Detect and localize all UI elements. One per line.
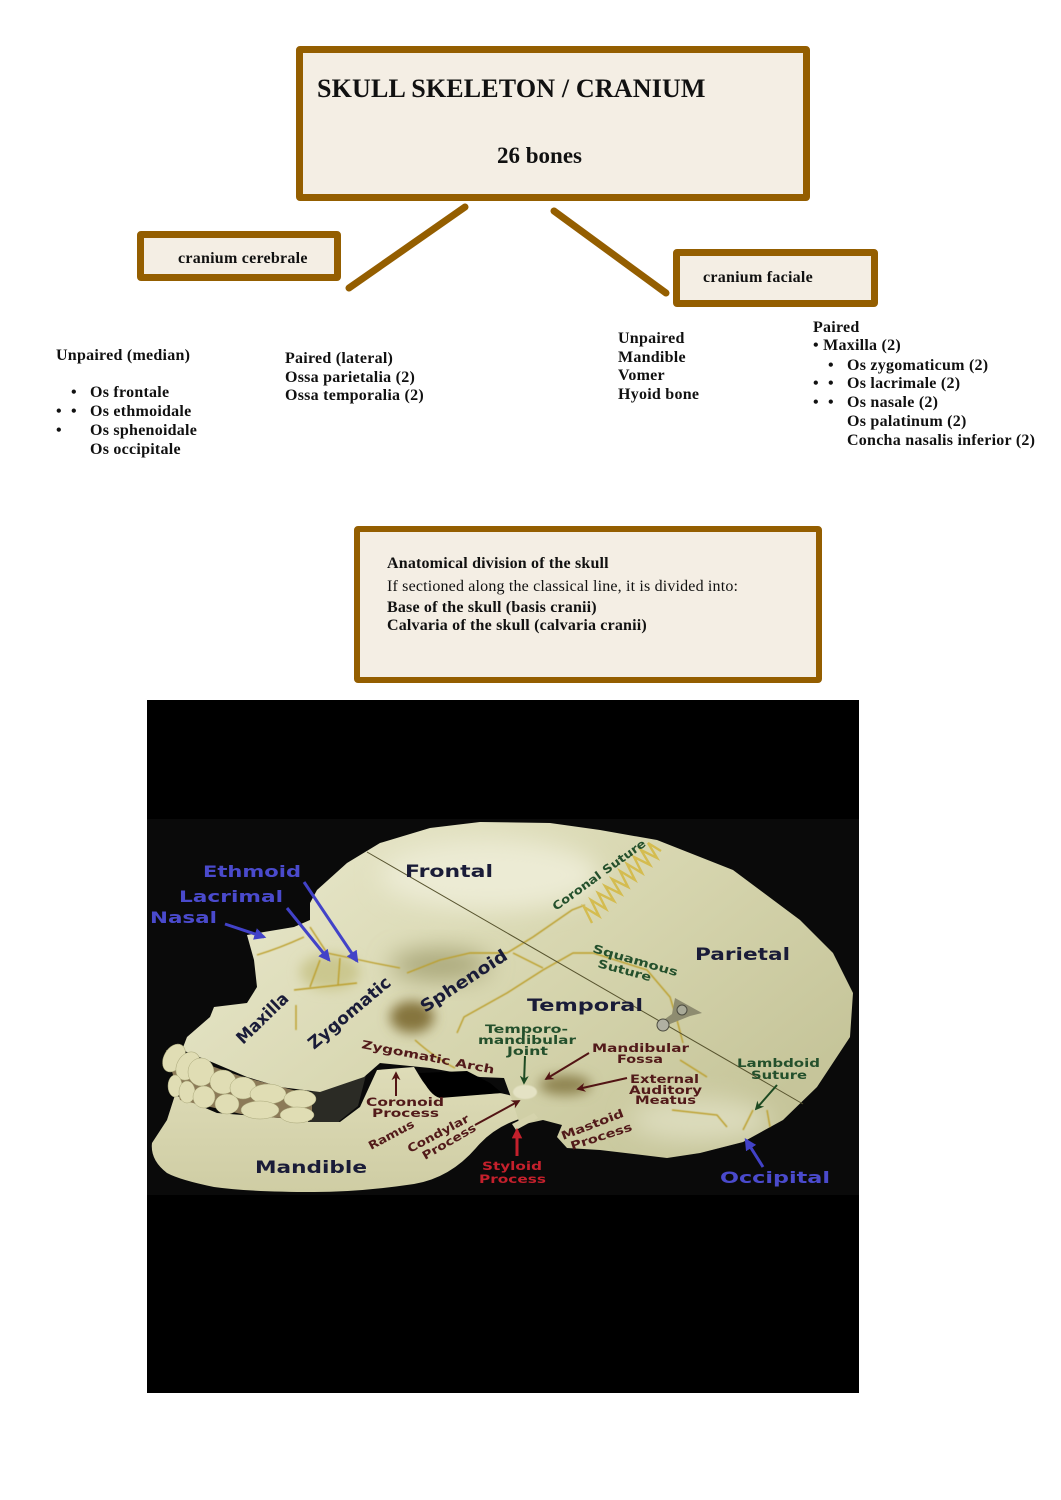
text: base of the skull: Base of the skull (basis cranii) [387,599,597,616]
text block: unpaired median bones: Os frontale [90,384,169,401]
label: Suture (lambdoid): Suture [751,1068,807,1082]
label: Condylar Process second line: Process [420,1120,479,1163]
text block: unpaired median bones: • [71,384,77,401]
label: Joint: Joint [506,1044,549,1058]
green arrows [524,1056,777,1109]
teeth [158,1040,316,1123]
label: Mandibular Fossa: Mandibular [592,1041,689,1055]
label: cranium cerebrale: cranium cerebrale [178,250,308,267]
arrow: styloid process [516,1130,518,1156]
sutures [257,905,770,1130]
label: Zygomatic: Zygomatic [304,973,395,1054]
tooth gum base [166,1050,312,1120]
arrow: temporomandibular joint [524,1056,525,1083]
text block: paired facial bones: • [828,357,834,374]
label: Styloid: Styloid [482,1159,542,1173]
sphenofrontal suture [407,905,585,973]
text block: unpaired facial bones: Vomer [618,367,665,384]
arrow: occipital [746,1140,763,1167]
arrow: mandibular fossa [546,1053,589,1079]
styloid process [512,1113,538,1130]
label: Maxilla: Maxilla [233,989,293,1049]
zygomatic facial suture [295,1005,297,1030]
text block: unpaired median bones: • [56,403,62,420]
label: Frontal: Frontal [405,862,493,882]
connector to cranium faciale [554,211,666,293]
image band [147,819,859,1195]
label: External Auditory Meatus third line: Meatus [635,1093,696,1107]
label: Squamous: Squamous [591,941,680,979]
text: calvaria of the skull: Calvaria of the skull (calvaria cranii) [387,617,647,634]
label: Mandibular Fossa second line: Fossa [617,1052,663,1066]
label: Ethmoid: Ethmoid [203,862,301,881]
label: Sphenoid: Sphenoid [417,946,512,1017]
text block: paired facial bones: • [813,394,819,411]
heading: anatomical division: Anatomical division of the skull [387,555,609,572]
pin screw 1 [677,1005,687,1015]
arrows: connector lines [346,204,670,296]
diagonal section line [367,852,803,1104]
label: Occipital: Occipital [720,1168,830,1187]
label: Mastoid Process second line: Process [569,1120,634,1153]
text block: unpaired median bones: Unpaired (median) [56,347,190,364]
bone labels [233,862,790,1178]
maroon labels [360,1037,703,1163]
text block: paired lateral bones: Ossa temporalia (2) [285,387,424,404]
label: Parietal: Parietal [695,945,790,965]
text block: paired facial bones [813,319,1035,449]
zygomatic arch hole [419,1071,502,1098]
blue labels [150,862,830,1187]
label: cranium faciale: cranium faciale [703,269,813,286]
text block: paired facial bones: Os palatinum (2) [847,413,967,430]
label: Nasal: Nasal [150,908,217,927]
text block: paired facial bones: • Maxilla (2) [813,337,901,354]
blue arrows [225,882,763,1167]
arrow: condylar [475,1101,519,1125]
pin plate [658,998,702,1028]
text block: unpaired median bones: Os occipitale [90,441,181,458]
zygomatic arch suture [415,1040,455,1068]
text block: paired lateral bones: Ossa parietalia (2) [285,369,415,386]
cranium and upper face [182,822,853,1158]
sphenoparietal branch [513,953,543,968]
label: Mastoid: Mastoid [559,1106,626,1143]
shading on skull [300,839,770,1142]
label: Zygomatic Arch: Zygomatic Arch [360,1037,496,1077]
label: Lacrimal: Lacrimal [179,887,283,906]
gap behind teeth [308,1075,366,1122]
panel: title box [296,46,810,201]
panel: anatomical division of the skull [354,526,822,683]
text block: paired facial bones: Os nasale (2) [847,394,938,411]
text block: unpaired facial bones [618,330,699,403]
text block: unpaired median bones: Os ethmoidale [90,403,191,420]
arrow: lambdoid suture [756,1085,777,1109]
text block: unpaired median bones: • [56,422,62,439]
label: Mandible: Mandible [255,1158,367,1178]
label: Suture: Suture [596,956,653,984]
coronal suture [584,843,661,923]
text block: unpaired facial bones: Mandible [618,349,686,366]
maroon arrows [396,1053,627,1125]
image background [147,700,859,1393]
text block: paired facial bones: Concha nasalis inferior (2) [847,432,1035,449]
mandible [152,1067,535,1192]
text block: paired lateral bones [285,350,424,404]
nasal suture [257,937,304,955]
label: Coronoid Process second line: Process [372,1106,439,1120]
label: Coronoid Process: Coronoid [366,1095,444,1109]
arrow: ethmoid [304,882,357,961]
squamous suture [457,953,683,1043]
styloid label [479,1159,546,1186]
label: Condylar Process: Condylar [405,1111,472,1156]
label: Coronal Suture: Coronal Suture [550,836,649,913]
arrow: coronoid [395,1073,397,1096]
illustration: labelled lateral skull [147,700,859,1393]
green labels [478,836,820,1082]
label: Process (styloid): Process [479,1172,546,1186]
label: Temporo-: Temporo- [485,1022,568,1036]
rear highlight [630,1098,770,1142]
label: External Auditory Meatus second line: Auditory [629,1083,703,1097]
text block: unpaired median bones: • [71,403,77,420]
orbit sutures [310,927,400,968]
text block: paired lateral bones: Paired (lateral) [285,350,393,367]
text block: unpaired median bones: Os sphenoidale [90,422,197,439]
text block: unpaired median bones [56,347,197,458]
text block: unpaired facial bones: Hyoid bone [618,386,699,403]
arrow: nasal [225,924,264,937]
label: mandibular: mandibular [478,1033,576,1047]
temple shadow [390,1001,434,1033]
upper skull highlight [380,839,600,911]
text block: unpaired facial bones: Unpaired [618,330,685,347]
arrow: lacrimal [287,908,329,960]
condyle highlight [513,1085,537,1099]
arrow: auditory meatus [578,1078,627,1089]
metal pin [657,998,702,1031]
title heading: SKULL SKELETON / CRANIUM [317,74,706,103]
panel: cranium cerebrale [137,231,341,281]
text block: paired facial bones: • [813,375,819,392]
label: External Auditory Meatus: External [630,1072,699,1086]
label: Ramus: Ramus [366,1117,417,1153]
brow shadow [390,949,490,981]
text: sectioning description: If sectioned along the classical line, it is divided into: [387,578,738,595]
lambdoid branches [672,1060,770,1130]
text block: paired facial bones: • [828,375,834,392]
connector to cranium cerebrale [349,207,465,288]
pin screw 2 [657,1019,669,1031]
ear shadow [539,1075,591,1095]
label: Temporal: Temporal [527,996,643,1016]
orbit tone [300,954,360,990]
subtitle: 26 bones: 26 bones [497,143,582,168]
text block: paired facial bones: Os zygomaticum (2) [847,357,988,374]
panel: cranium faciale [673,249,878,307]
text block: paired facial bones: Os lacrimale (2) [847,375,960,392]
label: Lambdoid: Lambdoid [737,1056,820,1070]
text block: paired facial bones: • [828,394,834,411]
text block: paired facial bones: Paired [813,319,860,336]
